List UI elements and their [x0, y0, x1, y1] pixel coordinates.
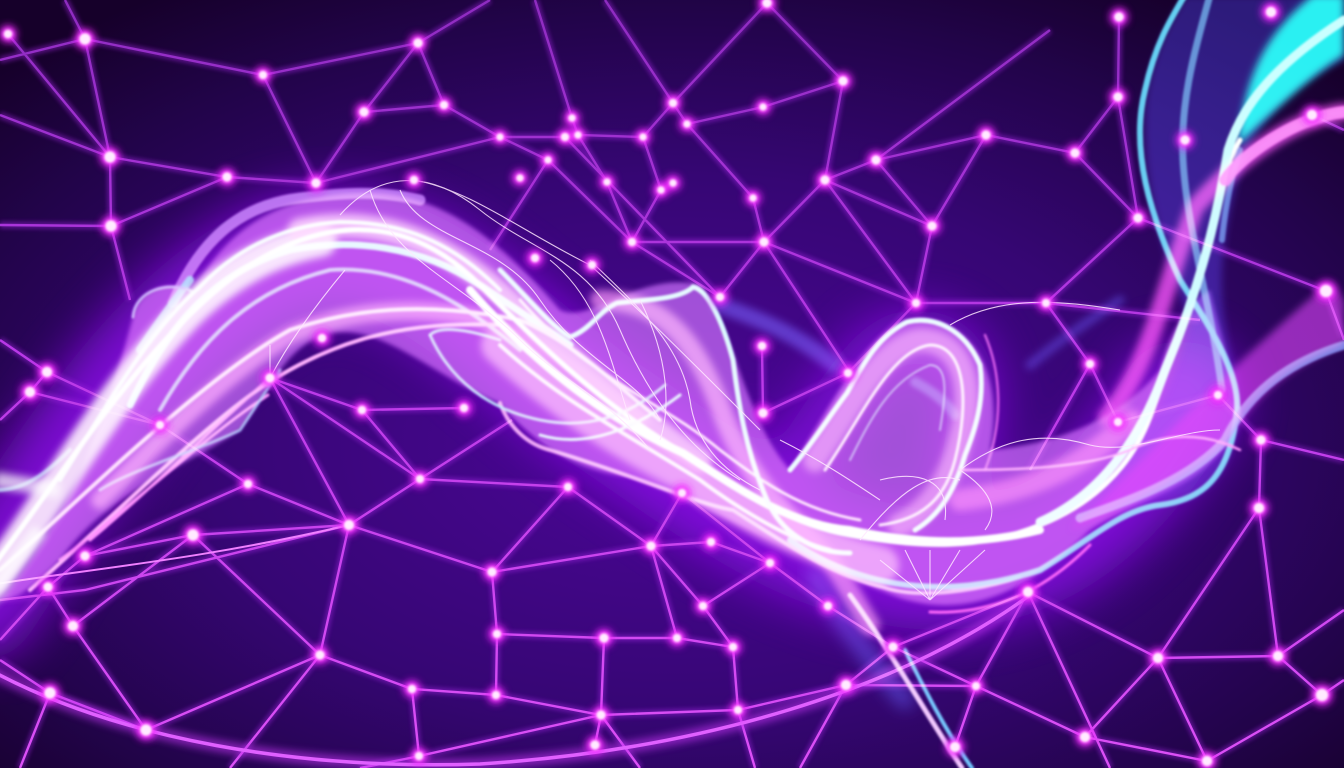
fine filament threads	[270, 180, 1220, 600]
white left end glow	[0, 480, 60, 590]
large arc at bottom left	[0, 525, 1030, 765]
wide soft bands	[0, 112, 1344, 625]
translucent ribbon bodies	[0, 0, 1344, 605]
purple halo behind ribbons	[0, 251, 1180, 600]
blue under-ribbons	[720, 300, 1120, 700]
